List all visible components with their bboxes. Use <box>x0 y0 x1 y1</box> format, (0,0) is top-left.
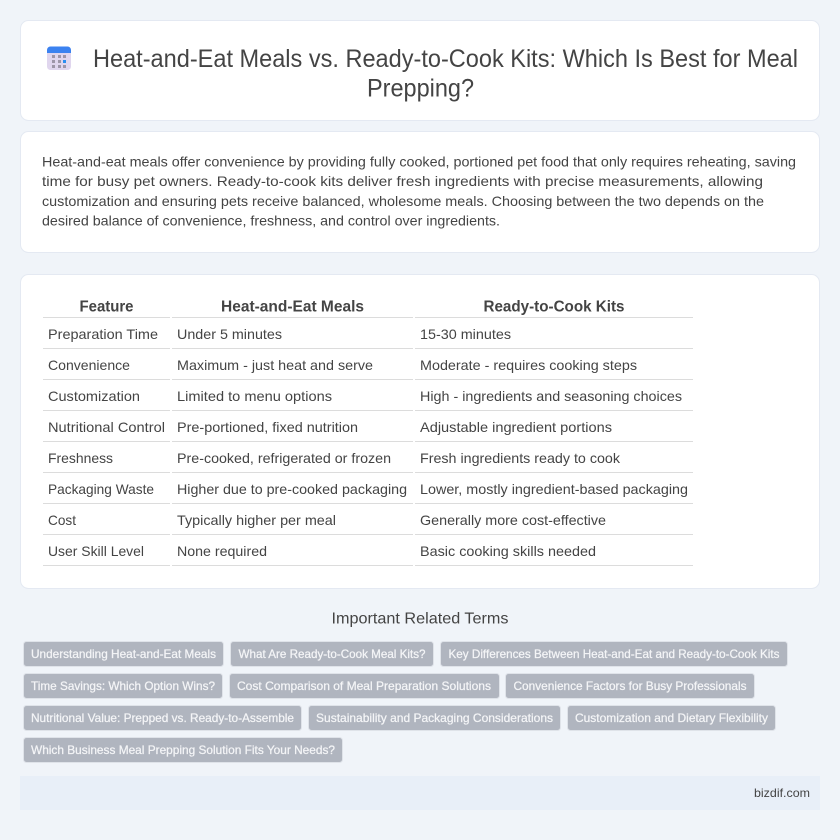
tag: Key Differences Between Heat-and-Eat and Ready-to-Cook Kits <box>448 647 780 661</box>
row: user skill level <box>48 543 596 559</box>
title: Prepping? <box>367 74 474 102</box>
title <box>93 45 798 102</box>
row: cost: Typically higher per meal <box>177 512 336 528</box>
tag: Sustainability and Packaging Considerations <box>316 711 553 725</box>
row: customization: High - ingredients and seasoning choices <box>420 388 682 404</box>
row: convenience <box>48 357 637 373</box>
row: convenience: Convenience <box>48 357 130 373</box>
row: convenience: Maximum - just heat and serve <box>177 357 373 373</box>
tag <box>24 738 342 762</box>
row: preparation time: Preparation Time <box>48 326 158 342</box>
tag <box>230 674 500 698</box>
tag: Cost Comparison of Meal Preparation Solutions <box>237 679 491 693</box>
row: packaging waste: Lower, mostly ingredient-based packaging <box>420 481 688 497</box>
footer <box>20 776 820 810</box>
row: customization: Limited to menu options <box>177 388 332 404</box>
tag <box>568 706 776 730</box>
row: customization <box>48 388 682 404</box>
panel: introduction text: time for busy pet owners. Ready-to-cook kits deliver fresh ingredients with precise measurements, allowing <box>42 173 763 189</box>
tag: Customization and Dietary Flexibility <box>575 711 768 725</box>
table rules <box>43 318 693 566</box>
tag <box>24 642 224 666</box>
heading: important related terms: Important Related Terms <box>332 610 508 628</box>
panel: comparison table <box>20 274 820 588</box>
table header: Heat-and-Eat Meals <box>221 298 364 316</box>
tag: Time Savings: Which Option Wins? <box>31 679 215 693</box>
related terms tags <box>24 642 788 762</box>
panel: introduction text: customization and ensuring pets receive balanced, wholesome meals. Choosing between the two depends on the <box>42 193 764 209</box>
tag <box>440 642 788 666</box>
row: nutritional control: Adjustable ingredient portions <box>420 419 612 435</box>
row: nutritional control: Nutritional Control <box>48 419 165 435</box>
panel: introduction text: Heat-and-eat meals offer convenience by providing fully cooked, portioned pet food that only requires reheating, saving <box>42 154 796 170</box>
tag: Understanding Heat-and-Eat Meals <box>31 647 216 661</box>
row: user skill level: None required <box>177 543 267 559</box>
panel: introduction text <box>20 132 820 252</box>
tag <box>308 706 560 730</box>
tag <box>24 674 222 698</box>
row: cost <box>48 512 606 528</box>
row: packaging waste: Higher due to pre-cooked packaging <box>177 481 407 497</box>
panel: introduction text: desired balance of convenience, freshness, and control over ingredients. <box>42 212 500 228</box>
row: cost: Generally more cost-effective <box>420 512 606 528</box>
row: user skill level: User Skill Level <box>48 543 144 559</box>
row: freshness <box>48 450 621 466</box>
row: convenience: Moderate - requires cooking steps <box>420 357 637 373</box>
tag: What Are Ready-to-Cook Meal Kits? <box>238 647 426 661</box>
row: cost: Cost <box>48 512 76 528</box>
table header: Ready-to-Cook Kits <box>484 298 625 316</box>
tag <box>24 706 302 730</box>
tag: Which Business Meal Prepping Solution Fits Your Needs? <box>31 743 335 757</box>
table header: Feature <box>80 298 134 316</box>
row: preparation time: 15-30 minutes <box>420 326 511 342</box>
row: packaging waste <box>48 481 688 497</box>
panel: header <box>20 20 820 120</box>
row: freshness: Freshness <box>48 450 113 466</box>
tag <box>230 642 434 666</box>
icon: calendar <box>47 46 71 70</box>
row: preparation time <box>48 326 511 342</box>
title: Heat-and-Eat Meals vs. Ready-to-Cook Kits: Which Is Best for Meal <box>93 45 798 73</box>
row: preparation time: Under 5 minutes <box>177 326 282 342</box>
row: nutritional control <box>48 419 612 435</box>
table header <box>80 298 625 316</box>
row: user skill level: Basic cooking skills needed <box>420 543 596 559</box>
tag: Nutritional Value: Prepped vs. Ready-to-Assemble <box>31 711 294 725</box>
tag: Convenience Factors for Busy Professionals <box>514 679 746 693</box>
tag <box>506 674 754 698</box>
row: freshness: Fresh ingredients ready to cook <box>420 450 621 466</box>
row: freshness: Pre-cooked, refrigerated or frozen <box>177 450 391 466</box>
footer: bizdif.com <box>754 786 810 800</box>
row: packaging waste: Packaging Waste <box>48 481 154 497</box>
row: customization: Customization <box>48 388 140 404</box>
row: nutritional control: Pre-portioned, fixed nutrition <box>177 419 358 435</box>
